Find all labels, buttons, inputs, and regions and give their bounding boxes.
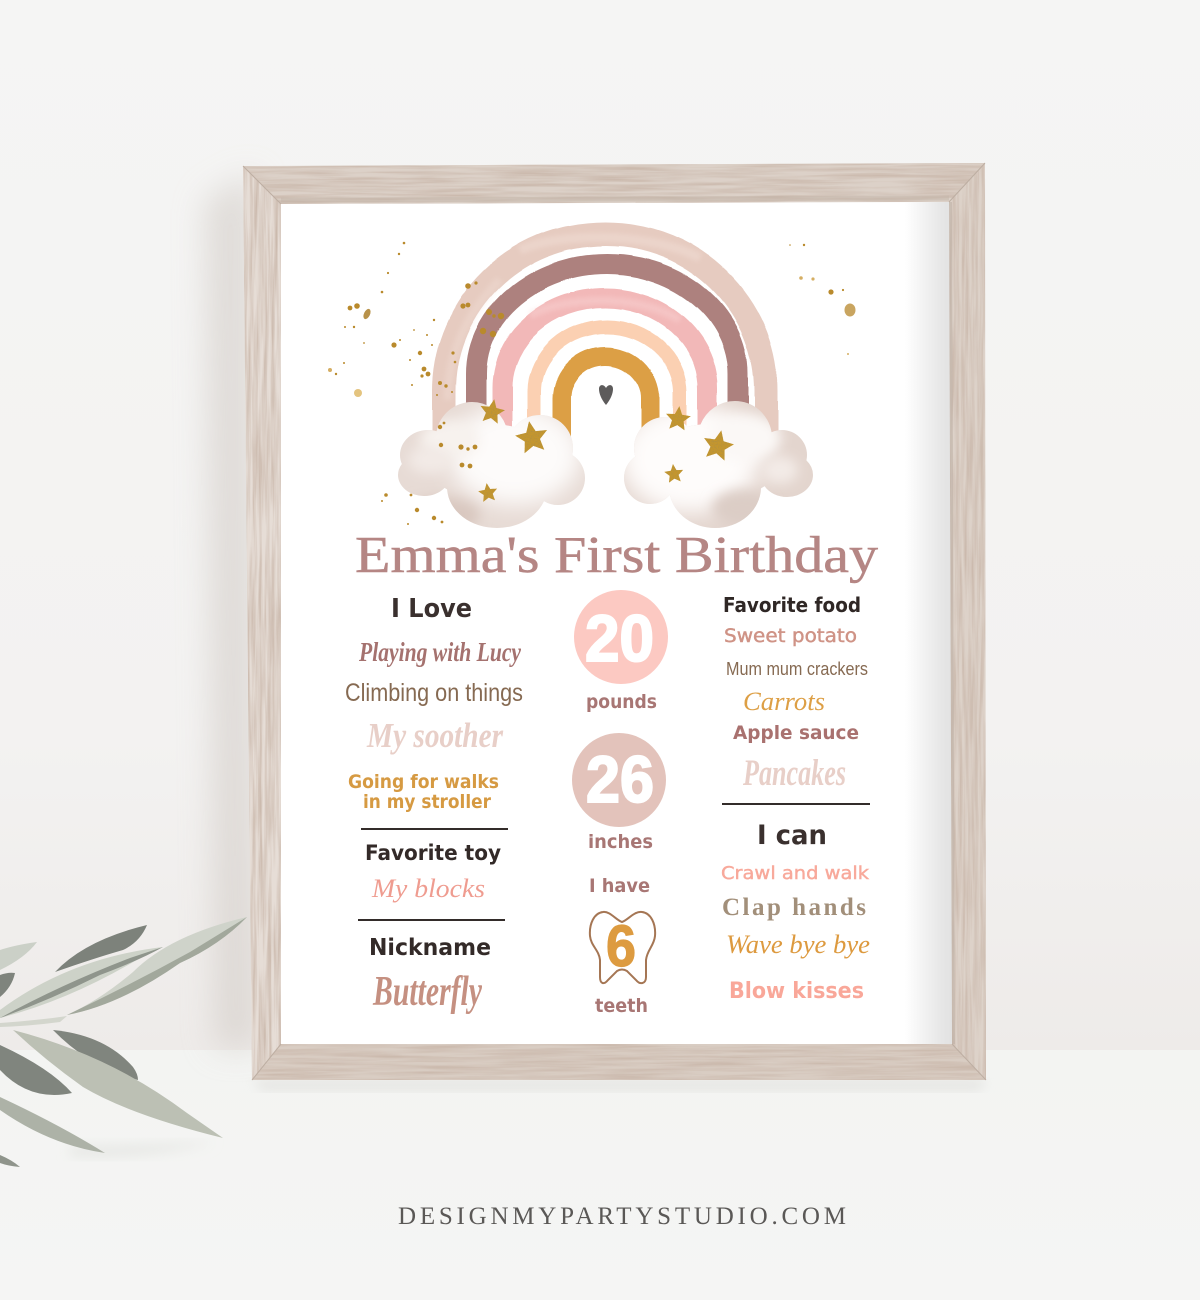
frame shadow on shelf — [252, 1080, 986, 1090]
item: My soother: My soother — [366, 716, 503, 755]
rainbow watercolour highlights — [448, 237, 700, 400]
gold stars — [477, 397, 736, 502]
item: Pancakes: Pancakes — [742, 753, 846, 794]
stat: 26 inches: inches — [588, 831, 653, 853]
frame shadow on wall — [205, 172, 258, 1048]
item: Going for walks in my stroller: Going for walks — [348, 771, 499, 793]
outer blush arc — [444, 234, 766, 451]
item: Carrots: Carrots — [743, 687, 825, 716]
heading: Favorite food: Favorite food — [723, 593, 861, 617]
heading: I can: I can — [757, 820, 827, 851]
stat: 20 pounds — [574, 590, 668, 713]
item: Apple sauce: Apple sauce — [733, 722, 859, 744]
rainbow — [444, 234, 766, 451]
paper print — [281, 202, 952, 1044]
label: I have: I have — [589, 875, 650, 897]
icon: tooth with 6 — [590, 912, 655, 983]
item: Playing with Lucy: Playing with Lucy — [358, 637, 522, 667]
item: Going for walks in my stroller — [348, 771, 499, 813]
pink arc — [502, 298, 708, 451]
right cloud — [624, 401, 813, 528]
title: Emma's First Birthday — [355, 527, 878, 584]
item: My blocks: My blocks — [371, 874, 485, 903]
panel: center stats — [572, 590, 668, 1017]
background: shelf — [0, 1050, 1200, 1300]
gold splatter — [328, 242, 856, 525]
stat: 20 pounds: 20 — [585, 601, 654, 675]
item: Going for walks in my stroller: in my stroller — [363, 791, 492, 813]
item: Crawl and walk: Crawl and walk — [721, 863, 870, 884]
mauve arc — [476, 264, 738, 451]
stat: 26 inches: 26 — [586, 742, 654, 816]
item: Sweet potato: Sweet potato — [724, 625, 857, 647]
heading: Favorite toy: Favorite toy — [365, 841, 501, 865]
stat: 26 inches — [572, 733, 666, 853]
icon: heart — [599, 385, 613, 405]
peach arc — [534, 327, 680, 451]
leaf shadows on shelf — [70, 1142, 215, 1157]
icon: olive branch — [0, 917, 247, 1167]
panel: right column — [721, 593, 870, 1004]
item: Blow kisses: Blow kisses — [729, 979, 864, 1004]
panel: left column — [345, 594, 523, 1015]
item: Clap hands: Clap hands — [722, 894, 866, 921]
gold arc — [562, 356, 650, 441]
picture frame — [243, 163, 986, 1080]
item: Wave bye bye: Wave bye bye — [726, 930, 870, 959]
footer: studio url: DESIGNMYPARTYSTUDIO.COM — [398, 1203, 846, 1230]
left cloud — [398, 402, 585, 528]
heading: I Love: I Love — [391, 594, 472, 624]
label: teeth: teeth — [595, 995, 648, 1017]
item: Butterfly: Butterfly — [372, 969, 482, 1015]
stat: 20 pounds: pounds — [586, 691, 657, 713]
heading: Nickname: Nickname — [369, 935, 491, 961]
icon: tooth with 6: 6 — [606, 914, 636, 979]
item: Mum mum crackers: Mum mum crackers — [726, 659, 868, 679]
item: Climbing on things: Climbing on things — [345, 679, 523, 707]
